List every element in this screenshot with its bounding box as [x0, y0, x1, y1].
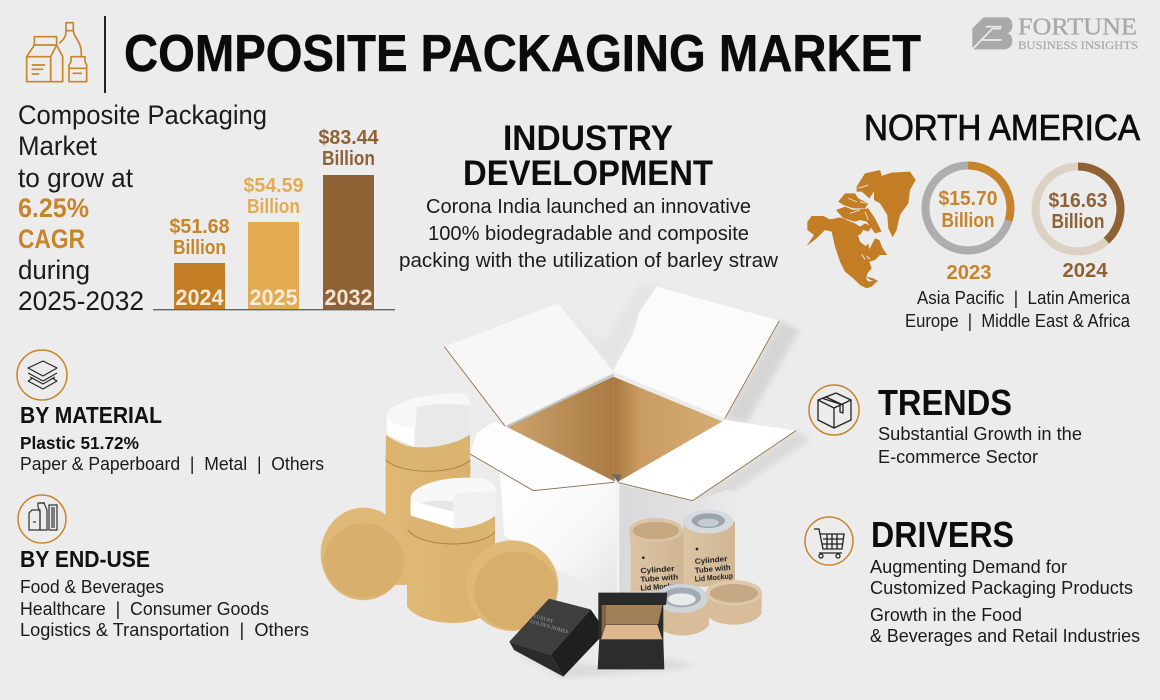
drivers section: [870, 514, 1140, 646]
bar 2032: Billion: [322, 148, 375, 170]
trends section: Substantial Growth in the: [878, 424, 1082, 444]
bar 2024: [170, 216, 230, 310]
text block: market growth summary: during: [18, 255, 90, 285]
title: COMPOSITE PACKAGING MARKET: [124, 25, 921, 83]
front tube: [407, 478, 496, 623]
open kraft tube: Cylinder: [640, 564, 675, 575]
bar 2032: [318, 127, 379, 310]
trends section: [878, 382, 1082, 467]
bar 2024: $51.68: [170, 216, 230, 238]
icon: parcel box: [809, 385, 859, 435]
industry development text: 100% biodegradable and composite: [428, 223, 749, 245]
bar 2024: 2024: [176, 285, 224, 310]
open box: [598, 593, 667, 669]
text block: market growth summary: 6.25%: [18, 193, 89, 223]
drivers section: Customized Packaging Products: [870, 578, 1133, 598]
open kraft tube: Tube with: [640, 572, 679, 584]
small cylinder tubes: [629, 510, 762, 636]
illustration: composite packaging products: [321, 283, 810, 678]
by material section: Paper & Paperboard | Metal | Others: [20, 454, 324, 474]
by material section: BY MATERIAL: [20, 402, 162, 428]
donut 2023: [926, 166, 1010, 284]
trends section: TRENDS: [878, 382, 1012, 423]
tube with metal lid: Tube with: [694, 563, 731, 575]
black gift boxes: [509, 593, 697, 678]
bar 2025: [244, 175, 304, 310]
text block: market growth summary: Market: [18, 131, 97, 161]
industry development text: [399, 196, 779, 272]
kraft tubes with paper liners: [321, 393, 558, 631]
map: North America: [807, 170, 916, 288]
bar 2025: 2025: [250, 285, 298, 310]
other regions: [905, 288, 1131, 331]
open kraft tube: Lid Mockup: [640, 581, 681, 593]
text block: market growth summary: CAGR: [18, 224, 85, 254]
header divider: [104, 16, 106, 93]
icon: material layers: [17, 350, 67, 400]
bar 2025: Billion: [247, 196, 300, 218]
text block: market growth summary: [18, 100, 267, 316]
by end-use section: Food & Beverages: [20, 577, 164, 597]
donut 2024: 2024: [1062, 259, 1108, 282]
industry development heading: DEVELOPMENT: [463, 154, 713, 193]
other regions: Asia Pacific | Latin America: [917, 288, 1131, 308]
kraft lid: [706, 580, 762, 625]
drivers section: DRIVERS: [871, 514, 1014, 555]
donut 2023: Billion: [942, 210, 994, 232]
icon: end-use products: [18, 495, 66, 543]
industry development text: packing with the utilization of barley straw: [399, 250, 779, 272]
icon: shopping cart: [805, 517, 853, 565]
metal-rim jar: [655, 584, 709, 636]
by material section: [20, 402, 324, 474]
by end-use section: Logistics & Transportation | Others: [20, 620, 309, 640]
industry development heading: [463, 119, 713, 193]
logo: Fortune Business Insights: BUSINESS INSIGHTS: [1018, 38, 1138, 52]
logo: Fortune Business Insights: FORTUNE: [1018, 14, 1137, 40]
donut 2024: Billion: [1052, 211, 1104, 233]
drivers section: & Beverages and Retail Industries: [870, 626, 1140, 646]
tube with metal lid: Cylinder: [694, 554, 728, 566]
by end-use section: [20, 546, 309, 640]
closed box: [509, 599, 606, 677]
bar 2025: $54.59: [244, 175, 304, 197]
bar 2032: 2032: [324, 285, 372, 310]
other regions: Europe | Middle East & Africa: [905, 311, 1131, 331]
donut 2024: [1036, 166, 1120, 282]
right lid: [466, 540, 558, 631]
open white box: [444, 283, 810, 595]
text block: market growth summary: 2025-2032: [18, 286, 144, 316]
closed box: GOLDEN HOMES: [529, 620, 569, 635]
trends section: E-commerce Sector: [878, 447, 1038, 467]
industry development text: Corona India launched an innovative: [426, 196, 751, 218]
bar 2032: $83.44: [318, 127, 379, 149]
drivers section: Augmenting Demand for: [870, 557, 1067, 577]
donut 2023: 2023: [946, 261, 992, 284]
bar 2024: Billion: [173, 237, 226, 259]
by end-use section: BY END-USE: [20, 546, 150, 572]
logo: Fortune Business Insights: [972, 14, 1138, 52]
open kraft tube: [629, 518, 683, 593]
donut 2024: $16.63: [1048, 190, 1108, 212]
by material section: Plastic 51.72%: [20, 433, 139, 453]
industry development heading: INDUSTRY: [503, 119, 673, 158]
left lid: [321, 508, 406, 600]
bar chart: market size: [153, 127, 395, 310]
tube with metal lid: Lid Mockup: [694, 571, 734, 584]
by end-use section: Healthcare | Consumer Goods: [20, 599, 269, 619]
tube with metal lid: [683, 510, 735, 587]
drivers section: Growth in the Food: [870, 605, 1022, 625]
text block: market growth summary: to grow at: [18, 163, 133, 193]
header icon: carton, bottle and jar: [27, 23, 87, 82]
north america heading: NORTH AMERICA: [864, 107, 1140, 148]
donut 2023: $15.70: [938, 188, 998, 210]
closed box: LUXURY: [533, 614, 554, 625]
back tube: [386, 393, 470, 585]
text block: market growth summary: Composite Packaging: [18, 100, 267, 130]
